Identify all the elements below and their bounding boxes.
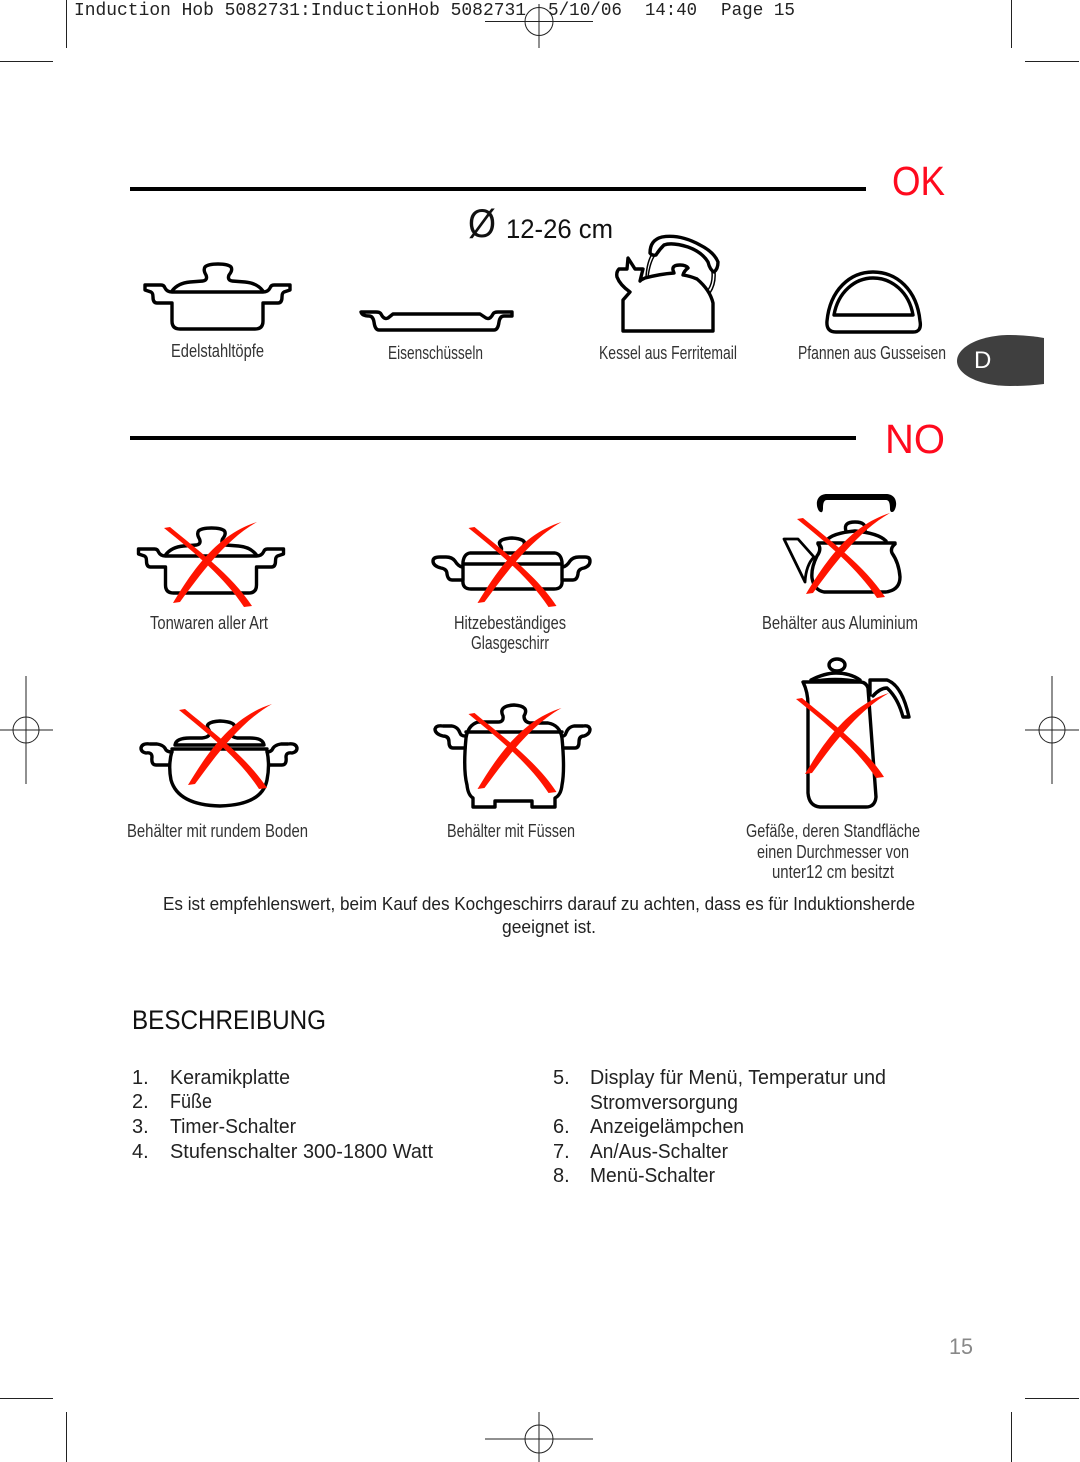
icon: aluminium kettle crossed out <box>784 494 900 598</box>
icon: iron dish <box>361 312 512 330</box>
list: parts 5 to 8: Menü-Schalter <box>590 1165 715 1187</box>
language tab D: D <box>974 347 991 374</box>
label: Pfannen aus Gusseisen: Pfannen aus Gusseisen <box>798 343 946 363</box>
list: parts 5 to 8: An/Aus-Schalter <box>590 1141 728 1163</box>
list: parts 5 to 8 <box>553 1067 886 1187</box>
label: Eisenschüsseln: Eisenschüsseln <box>388 343 483 363</box>
list: parts 5 to 8: 6. <box>553 1116 570 1138</box>
icon: pot with feet crossed out <box>435 705 590 807</box>
print slug line: 14:40 <box>645 1 697 21</box>
label: Behälter mit rundem Boden: Behälter mit rundem Boden <box>127 821 308 841</box>
language tab D <box>957 335 1044 386</box>
print slug line: Page 15 <box>721 1 795 21</box>
icon: narrow jug crossed out <box>796 659 909 807</box>
label: Behälter mit Füssen: Behälter mit Füssen <box>447 821 575 841</box>
list: parts 1 to 4: 2. <box>132 1091 149 1113</box>
print slug line: 5/10/06 <box>548 1 622 21</box>
list: parts 1 to 4: Timer-Schalter <box>170 1116 296 1138</box>
label: small base vessels: Gefäße, deren Standfläche <box>746 821 920 841</box>
heading: NO rule <box>130 436 856 440</box>
label: small base vessels: einen Durchmesser von <box>757 842 909 862</box>
icon: cast iron pan <box>827 272 920 332</box>
list: parts 1 to 4 <box>132 1067 433 1163</box>
icon: earthenware pot crossed out <box>138 522 284 607</box>
list: parts 1 to 4: Füße <box>170 1091 212 1113</box>
diameter label: 12-26 cm <box>506 214 613 244</box>
label: small base vessels: unter12 cm besitzt <box>772 862 894 882</box>
icon: stainless steel pot <box>145 264 290 329</box>
label: Hitzebeständiges Glasgeschirr: Hitzebeständiges <box>454 613 566 633</box>
icon: enamel kettle <box>617 236 718 331</box>
label: Tonwaren aller Art: Tonwaren aller Art <box>150 613 268 633</box>
page number: 15 <box>949 1334 973 1359</box>
label: Behälter aus Aluminium: Behälter aus Aluminium <box>762 613 918 633</box>
print slug line: Induction Hob 5082731:InductionHob 5082731 <box>74 1 526 21</box>
icon: glass dish crossed out <box>433 522 590 607</box>
list: parts 5 to 8: 7. <box>553 1141 570 1163</box>
label: Edelstahltöpfe: Edelstahltöpfe <box>171 341 264 361</box>
icon: round bottom pot crossed out <box>141 704 297 806</box>
list: parts 1 to 4: 4. <box>132 1141 149 1163</box>
text block: recommendation: Es ist empfehlenswert, beim Kauf des Kochgeschirrs darauf zu achten, dass es für Induktionsherde <box>163 894 915 914</box>
list: parts 5 to 8: Stromversorgung <box>590 1092 738 1114</box>
label: small base vessels <box>746 821 920 882</box>
diameter label <box>468 202 613 246</box>
list: parts 1 to 4: Keramikplatte <box>170 1067 290 1089</box>
heading: OK: OK <box>892 158 945 204</box>
heading: NO: NO <box>885 416 945 462</box>
print slug line <box>74 1 795 21</box>
heading: Beschreibung: BESCHREIBUNG <box>132 1005 326 1035</box>
list: parts 1 to 4: 1. <box>132 1067 149 1089</box>
list: parts 5 to 8: 8. <box>553 1165 570 1187</box>
list: parts 5 to 8: Anzeigelämpchen <box>590 1116 744 1138</box>
label: Hitzebeständiges Glasgeschirr: Glasgeschirr <box>471 633 549 653</box>
text block: recommendation <box>163 894 915 937</box>
list: parts 1 to 4: Stufenschalter 300-1800 Watt <box>170 1141 433 1163</box>
list: parts 1 to 4: 3. <box>132 1116 149 1138</box>
list: parts 5 to 8: 5. <box>553 1067 570 1089</box>
heading: OK rule <box>130 187 866 191</box>
list: parts 5 to 8: Display für Menü, Temperatur und <box>590 1067 886 1089</box>
label: Hitzebeständiges Glasgeschirr <box>454 613 566 653</box>
label: Kessel aus Ferritemail: Kessel aus Ferritemail <box>599 343 737 363</box>
text block: recommendation: geeignet ist. <box>502 917 596 937</box>
diameter label: Ø <box>468 202 496 246</box>
